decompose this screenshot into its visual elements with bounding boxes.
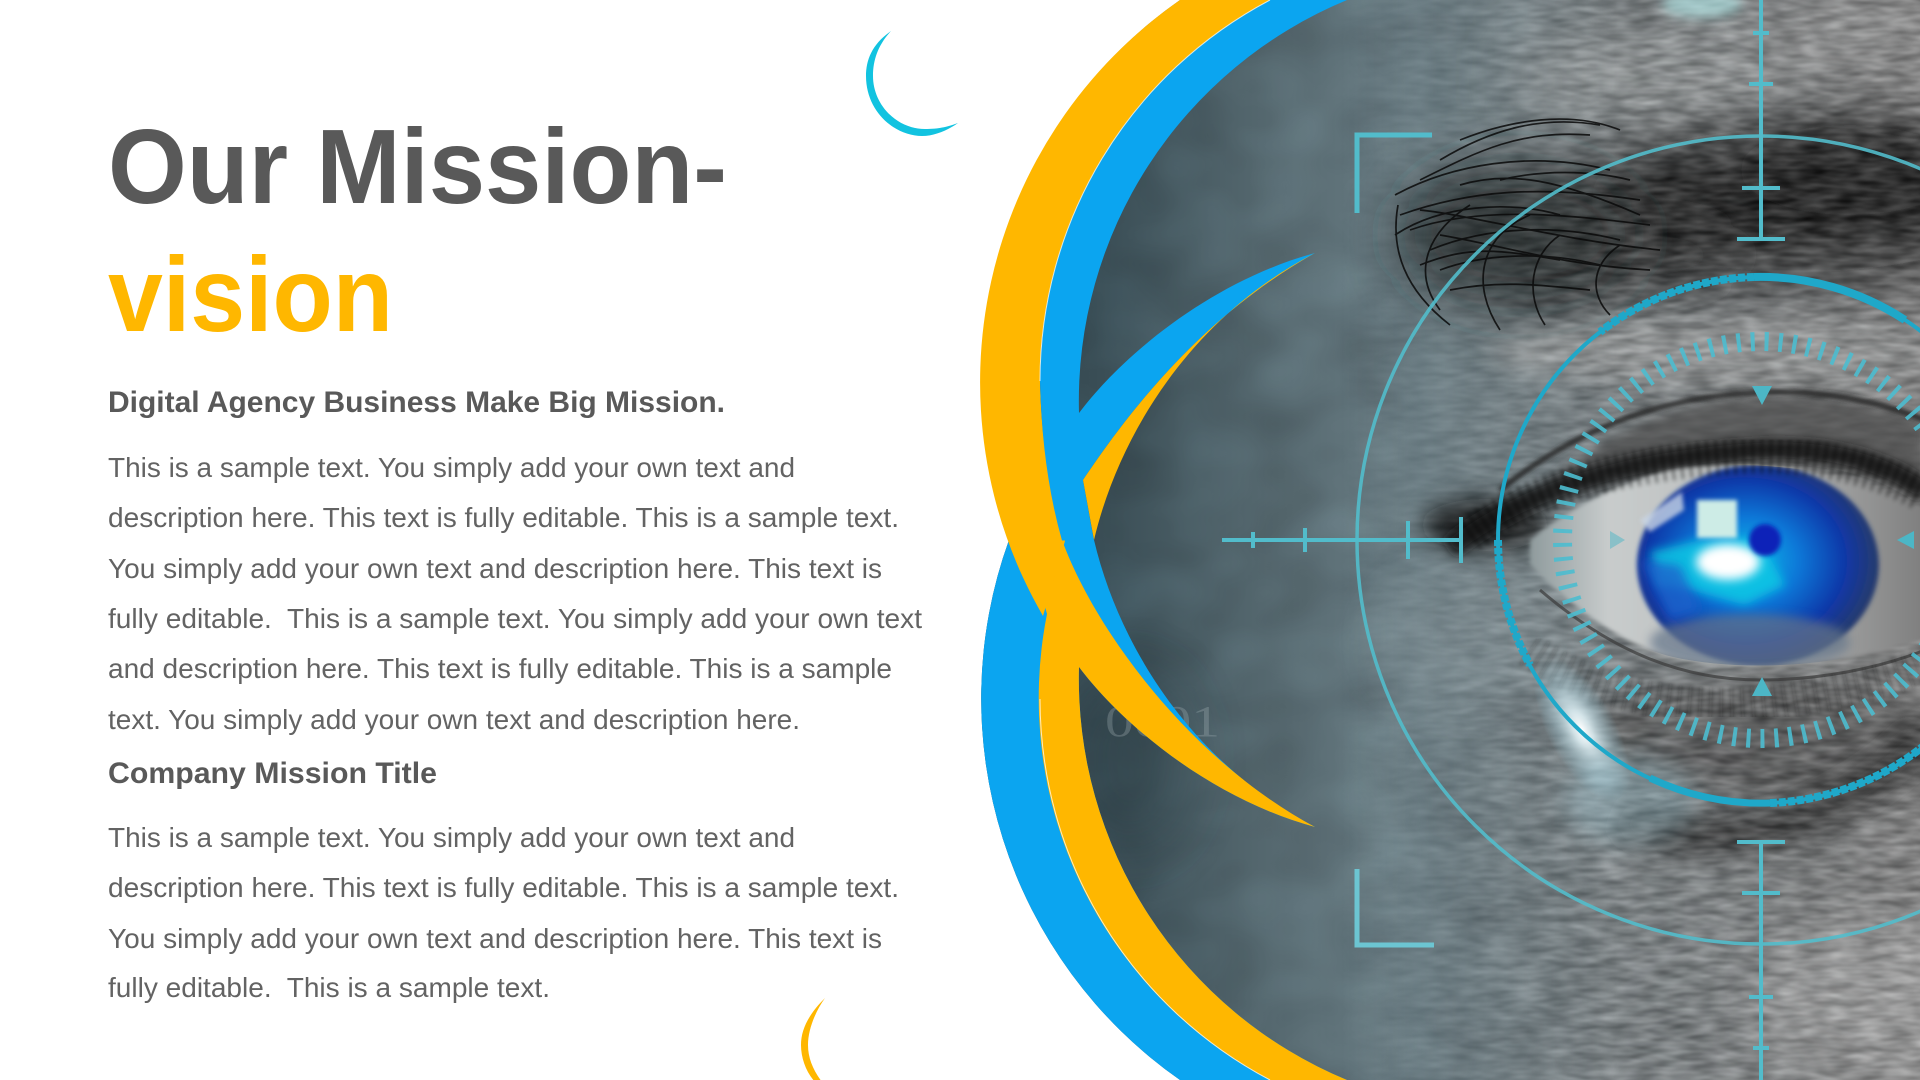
HUD targeting overlay [1222,0,1920,1080]
upper eyelid crease [1500,392,1920,490]
lower left blue patch [1642,560,1700,620]
iris ring [1498,277,1920,803]
paragraph 1: fully editable. This is a sample text. You simply add your own text [108,603,922,634]
heading: digital agency: Digital Agency Business Make Big Mission. [108,386,725,419]
grey lower iris [1650,614,1850,670]
paragraph 2 [108,822,899,1003]
paragraph 1: and description here. This text is fully editable. This is a sample [108,653,892,684]
paragraph 1 [108,452,922,735]
concentric swoosh shapes [980,0,1347,1080]
paragraph 2: You simply add your own text and description here. This text is [108,923,882,954]
upper lash shadow band [1450,450,1920,548]
bottom blue arc [981,540,1347,1080]
decorative cyan crescent [866,31,958,136]
top yellow sliver [1083,253,1315,540]
corner bracket bottom-left [1357,869,1434,945]
paragraph 2: fully editable. This is a sample text. [108,972,550,1003]
upper lashes [1470,455,1920,535]
paragraph 2: description here. This text is fully editable. This is a sample text. [108,872,899,903]
iris with reflections [1637,465,1879,670]
pupil [1749,524,1781,556]
tick ring [1562,342,1920,738]
paragraph 1: text. You simply add your own text and description here. [108,704,800,735]
title line 1: Our Mission- [108,108,727,226]
bottom crosshair [1737,842,1785,1080]
paragraph 1: description here. This text is fully editable. This is a sample text. [108,502,899,533]
cyan reflection [1650,540,1785,605]
left crosshair [1222,517,1461,563]
paragraph 1: This is a sample text. You simply add your own text and [108,452,795,483]
skin base [960,0,1920,1080]
photo: close-up of eye [960,0,1920,1080]
wrinkled skin texture [1404,0,1920,1080]
window reflection [1697,500,1737,538]
paragraph 1: You simply add your own text and description here. This text is [108,553,882,584]
lower lid and lashes [1540,590,1920,680]
eyebrow hairs [1395,119,1660,330]
heading: company mission: Company Mission Title [108,757,437,790]
bottom yellow arc [1035,540,1347,1080]
title line 2: vision [108,236,393,354]
corner bracket top-left [1357,135,1432,213]
paragraph 2: This is a sample text. You simply add your own text and [108,822,795,853]
mottled skin tone [1111,0,1874,1042]
decorative yellow crescent [801,998,825,1080]
large targeting circle [1357,136,1920,944]
title [108,108,727,354]
sclera [1530,465,1920,665]
upper eyelid fold [1556,394,1920,481]
target triangles [1610,386,1914,696]
lash reflection [1640,492,1684,532]
top crosshair [1737,0,1785,239]
white highlight [1696,544,1760,580]
top blue arc [1040,0,1347,540]
lens flare [1514,0,1742,845]
shading patches [1070,0,1920,1080]
hairline highlights [1040,0,1270,1080]
faint code text: 0001 [1105,697,1220,746]
top yellow arc [980,0,1270,616]
